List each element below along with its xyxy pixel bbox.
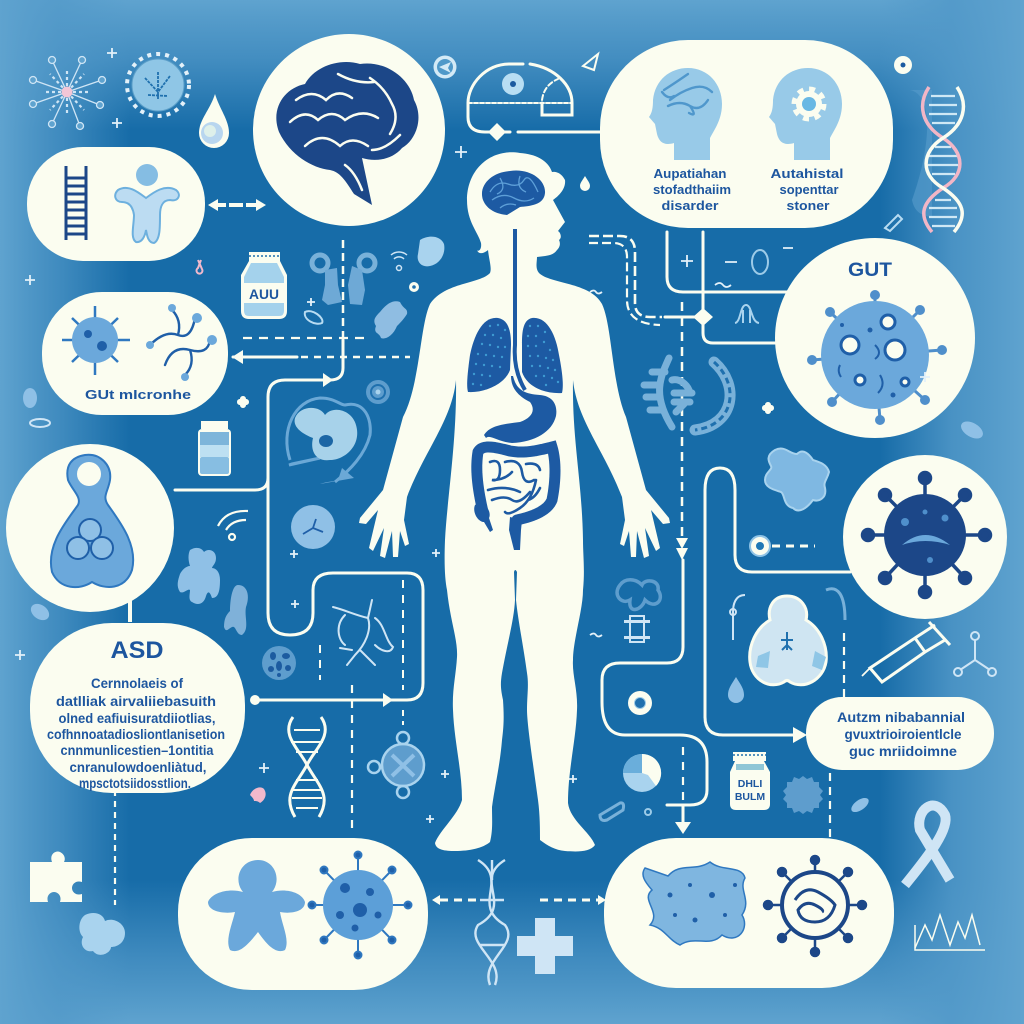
- icon: curled microbe: [617, 580, 660, 609]
- icon: blob: [374, 301, 407, 338]
- text: left head label: Aupatiahan: [654, 166, 727, 181]
- icon: dotted virus: [308, 852, 412, 958]
- organ: rectum: [509, 517, 522, 550]
- icon: small oval: [752, 250, 768, 274]
- organ: colon: [477, 447, 555, 520]
- panel: dark virus circle: [843, 455, 1007, 619]
- icon: gear cell: [783, 776, 823, 814]
- text: left head label: disarder: [662, 198, 718, 213]
- diagram: top dome shape: [434, 54, 600, 141]
- icon: hook: [730, 595, 745, 640]
- organ: right lung: [522, 318, 563, 393]
- panel: autism label pill: [806, 697, 994, 770]
- icon: light figure: [115, 164, 179, 243]
- text: right head label: Autahistal: [770, 166, 844, 181]
- text: gut microbiome: GUt mIcronhe: [85, 388, 191, 402]
- panel: gut microbiome pill: [42, 292, 228, 415]
- icon: child figure: [208, 860, 305, 951]
- text: pill label: guc mriidoimne: [849, 744, 958, 759]
- panel: brain circle: [253, 34, 445, 226]
- human body silhouette: [359, 152, 670, 851]
- organs: [467, 171, 563, 550]
- icon: cell with lobes: [368, 732, 424, 798]
- text: ASD description: cofhnnoatadiosliontlanisetion: [47, 727, 225, 742]
- icon: wifi arcs: [218, 511, 248, 540]
- icon: medicine bottle AUU: [241, 252, 287, 319]
- text: ASD description: cnnmunlicestien–1ontitia: [60, 743, 214, 758]
- icon: pink knot: [196, 260, 202, 274]
- icon: small flower sparks: [237, 396, 774, 414]
- icon: tiny drop by head: [580, 176, 590, 191]
- icon: ribbon: [905, 806, 950, 885]
- icon: line chart: [915, 915, 985, 950]
- icon: chain link: [600, 803, 624, 820]
- organ: appendix: [474, 504, 493, 532]
- icon: bottle DHLI BULM: [730, 752, 770, 810]
- text: pill label: Autzm nibabannial: [837, 710, 965, 725]
- icon: ring top: [894, 56, 912, 74]
- icon: abstract figure with cells: [51, 455, 133, 587]
- organ: small brain: [482, 171, 545, 215]
- icon: syringe: [862, 622, 950, 682]
- icon: DNA helix center: [289, 717, 325, 817]
- organ: esophagus: [515, 229, 525, 390]
- icon: baby figure: [750, 596, 826, 685]
- icon: small dotted cell: [262, 646, 296, 680]
- icon: pie circle: [623, 754, 661, 792]
- panel: left circle with figure: [6, 444, 174, 612]
- text: ASD description: datlliak airvaliiebasuith: [56, 694, 216, 709]
- organ: stomach: [484, 376, 556, 443]
- text: right head label: [770, 166, 844, 213]
- panel: ladder pill: [27, 147, 205, 261]
- icon: puzzle piece blue: [79, 913, 125, 955]
- icon: gingerbread blob: [178, 548, 220, 604]
- text: ASD description: mpsctotsiidosstlion.: [79, 776, 191, 791]
- icon: gut virus: [808, 292, 946, 424]
- icon: DNA background blob: [910, 90, 932, 218]
- icon: amoeba: [643, 862, 746, 945]
- icon: navy virus: [764, 856, 866, 956]
- heading: GUT: GUT: [848, 260, 892, 281]
- icon: bottle DHLI BULM: BULM: [735, 791, 765, 803]
- icon: bottle DHLI BULM: DHLI: [738, 778, 762, 790]
- panel: ASD text: [30, 623, 245, 793]
- icon: medical cross: [517, 918, 573, 974]
- panel: bottom left pill: [178, 838, 428, 990]
- icon: pink spot: [250, 787, 266, 803]
- icon: molecule right: [954, 632, 996, 676]
- icon: puzzle piece white: [30, 851, 82, 902]
- icon: bacteria coil: [765, 448, 829, 510]
- icon: squiggle network: [333, 600, 393, 665]
- panel: bottom right pill: [604, 838, 894, 988]
- icon: ring cell: [409, 282, 419, 292]
- icon: disc: [502, 73, 524, 95]
- text: ASD description: olned eafiuisuratdiiotlias,: [58, 711, 216, 726]
- icon: large brain: [276, 62, 418, 205]
- icon: branching microbe: [644, 358, 692, 427]
- icon: small gear cell: [366, 380, 390, 404]
- text: ASD description: cnranulowdoenliàtud,: [70, 760, 206, 775]
- icon: water drop: [199, 94, 229, 148]
- icon: wifi signal: [391, 252, 407, 270]
- text: ASD description: [47, 676, 225, 791]
- icon: side blob: [224, 585, 248, 635]
- text: ASD description: Cernnolaeis of: [91, 676, 183, 691]
- decorative sparks: [15, 48, 930, 823]
- icon: round microbe top: [127, 54, 189, 116]
- icon: tablets: [23, 388, 986, 815]
- text: right head label: stoner: [786, 198, 830, 213]
- heading: ASD: ASD: [110, 637, 164, 664]
- panel: two heads pill: [600, 40, 893, 228]
- icon: triangle: [583, 54, 598, 70]
- organ: small intestine: [488, 461, 540, 513]
- text: right head label: sopenttar: [780, 182, 838, 197]
- panel: gut circle: [775, 238, 975, 438]
- icon: mitochondrion capsule: [695, 362, 730, 430]
- icon: small cog: [624, 616, 650, 642]
- icon: tiny ring: [645, 809, 651, 815]
- icon: hooked tube: [826, 589, 845, 620]
- icon: medicine bottle AUU: AUU: [249, 286, 279, 302]
- icon: head with gear: [769, 68, 842, 160]
- icon: ladder: [66, 166, 86, 240]
- icon: small drop: [728, 677, 744, 703]
- icon: small ring: [434, 56, 456, 78]
- icon: heart with figure: [287, 398, 370, 484]
- icon: light molecule pair: [312, 255, 375, 305]
- icon: bacteria network: [146, 304, 217, 381]
- icon: small bean: [305, 311, 322, 324]
- text: left head label: stofadthaiim: [653, 182, 731, 197]
- text: pill label: [837, 710, 965, 759]
- icon: dark virus: [862, 472, 990, 598]
- arrowheads and nodes: [208, 199, 807, 905]
- organ: left lung: [467, 318, 511, 392]
- icon: chain braid: [475, 860, 508, 985]
- icon: spiky microbe: [62, 306, 130, 375]
- icon: round molecule cell: [291, 505, 335, 549]
- text: pill label: gvuxtrioiroientlcle: [844, 727, 962, 742]
- text: left head label: [653, 166, 731, 213]
- icon: M mark: [735, 305, 759, 323]
- icon: white blob top: [418, 237, 444, 266]
- icon: starburst top left: [30, 56, 106, 130]
- icon: pencil: [885, 215, 902, 231]
- icon: head with brain: [649, 68, 722, 160]
- icon: DNA helix top right: [923, 87, 963, 232]
- connector lines: [115, 205, 850, 905]
- icon: bottle left: [198, 421, 231, 476]
